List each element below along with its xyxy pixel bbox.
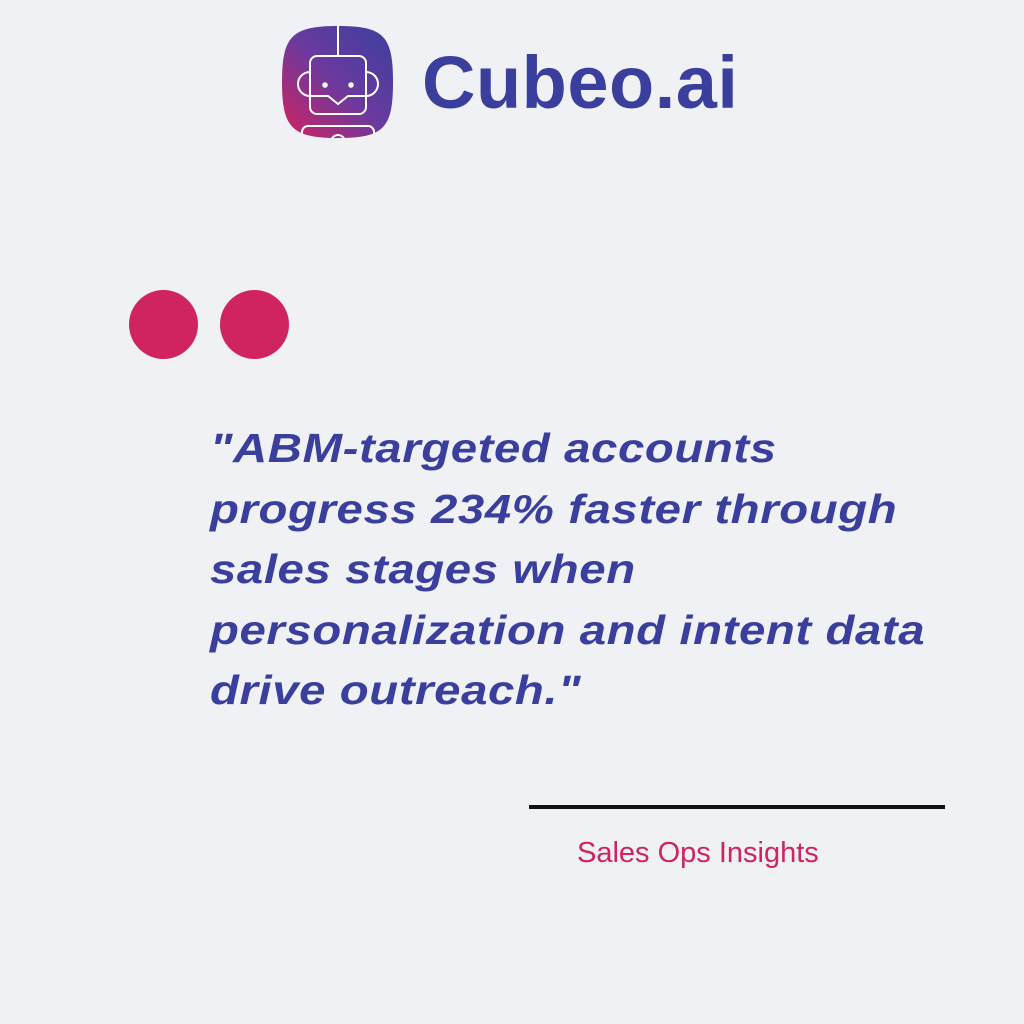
logo xyxy=(282,26,738,138)
wordmark: Cubeo.ai xyxy=(422,41,738,124)
quote text xyxy=(209,425,925,713)
quote text: personalization and intent data xyxy=(210,606,925,652)
icon: robot xyxy=(282,26,393,138)
source: Sales Ops Insights xyxy=(577,837,819,869)
divider line xyxy=(529,805,945,809)
quote text: drive outreach." xyxy=(210,667,581,713)
icon: quote dots xyxy=(129,290,289,359)
quote text: "ABM-targeted accounts xyxy=(210,425,777,471)
quote text: progress 234% faster through xyxy=(210,486,897,532)
quote text: sales stages when xyxy=(210,546,636,592)
